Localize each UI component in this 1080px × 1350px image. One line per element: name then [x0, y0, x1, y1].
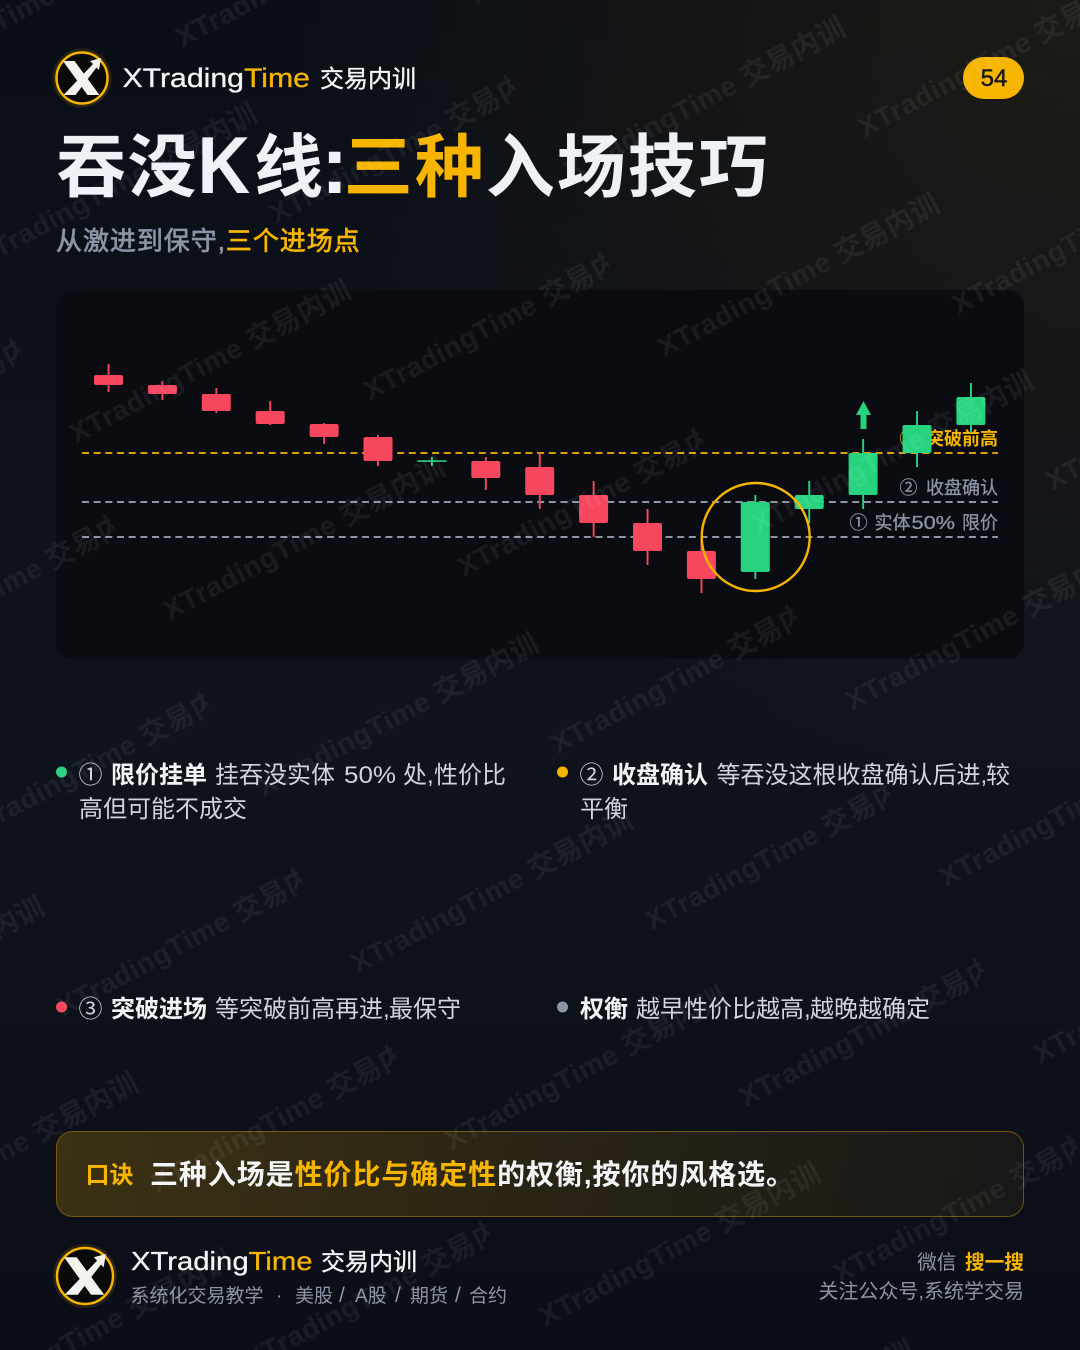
bullet: close confirmation: 较: [986, 762, 1010, 789]
footer tagline: ·: [276, 1286, 282, 1307]
footer call to action: 关注公众号,系统学交易: [818, 1280, 1024, 1303]
bullet: limit order: 处,: [403, 762, 434, 789]
title: [56, 120, 770, 211]
footer brand: 交易内训: [321, 1249, 417, 1276]
bullet: trade-off: 权衡: [580, 996, 628, 1023]
title: 吞没: [56, 129, 198, 206]
bullet: limit order: ①: [78, 762, 102, 789]
bullet: limit order: [56, 762, 506, 823]
highlight circle on engulfing candle: [702, 483, 810, 591]
brand name: XTrading Time: [122, 63, 310, 93]
level labels: [850, 428, 998, 533]
footer tagline: A股: [355, 1286, 387, 1307]
footer logo: [53, 1244, 117, 1308]
bullet: limit order: 挂吞没实体: [215, 762, 335, 789]
bullet: breakout entry: 等突破前高再进,: [215, 996, 390, 1023]
subtitle: 从激进到保守,三个进场点: [56, 226, 361, 256]
bullet: limit order: 50%: [344, 762, 396, 789]
footer call to action: [818, 1252, 1024, 1303]
bullet: close confirmation: ②: [580, 762, 604, 789]
title: K: [198, 120, 250, 211]
footer tagline: 美股: [295, 1285, 333, 1307]
bearish candles: [94, 364, 716, 593]
page number badge: [963, 57, 1024, 99]
level labels: ③: [900, 429, 918, 449]
bullet: limit order: 高但可能不成交: [79, 796, 247, 823]
callout: mnemonic: [56, 1132, 1024, 1216]
bullet: close confirmation: 等吞没这根收盘确认后进,: [716, 762, 987, 789]
panel: candlestick chart: [56, 290, 1024, 659]
level lines: [82, 453, 998, 537]
bullet: breakout entry: ③: [78, 996, 102, 1023]
footer tagline: /: [455, 1284, 461, 1307]
title: 三种入场技巧: [344, 129, 770, 206]
footer tagline: 系统化交易教学: [130, 1285, 264, 1307]
bullet: breakout entry: 突破进场: [111, 996, 207, 1023]
bullet: close confirmation: [557, 762, 1010, 823]
bullet: breakout entry: 最保守: [389, 996, 461, 1023]
footer tagline: 合约: [469, 1285, 507, 1307]
footer tagline: /: [339, 1284, 345, 1307]
page number badge: 54: [981, 65, 1007, 92]
bullet: close confirmation: 平衡: [580, 796, 628, 823]
level labels: 实体: [874, 513, 910, 533]
level labels: 50%: [912, 513, 955, 533]
level labels: ②: [900, 478, 918, 498]
brand name: 交易内训: [320, 66, 416, 93]
title: 线: [254, 129, 323, 206]
footer call to action: 搜一搜: [965, 1252, 1024, 1274]
bullet: limit order: 限价挂单: [111, 762, 207, 789]
bullet: breakout entry: [56, 996, 461, 1023]
arrow: breakout up: [856, 401, 871, 429]
bullet: trade-off: 越晚越确定: [810, 996, 930, 1023]
bullet: limit order: 性价比: [434, 762, 506, 789]
bullet: trade-off: [557, 996, 930, 1023]
bullet: close confirmation: 收盘确认: [612, 762, 708, 789]
level labels: 收盘确认: [926, 478, 998, 498]
footer brand: XTrading Time: [131, 1246, 312, 1276]
footer brand: [131, 1246, 417, 1276]
callout: mnemonic: 口诀: [86, 1162, 134, 1189]
callout: mnemonic: 三种入场是性价比与确定性的权衡,按你的风格选。: [150, 1159, 795, 1190]
brand name: [122, 63, 416, 93]
title: :: [321, 120, 348, 211]
footer call to action: 微信: [917, 1252, 956, 1274]
level labels: 突破前高: [926, 428, 998, 449]
footer tagline: [130, 1284, 507, 1307]
header logo: [52, 48, 112, 108]
bullet: trade-off: 越早性价比越高,: [636, 996, 811, 1023]
footer tagline: 期货: [410, 1285, 448, 1307]
footer tagline: /: [395, 1284, 401, 1307]
level labels: ①: [850, 513, 868, 533]
level labels: 限价: [962, 513, 998, 533]
bullish candles: [417, 383, 985, 579]
